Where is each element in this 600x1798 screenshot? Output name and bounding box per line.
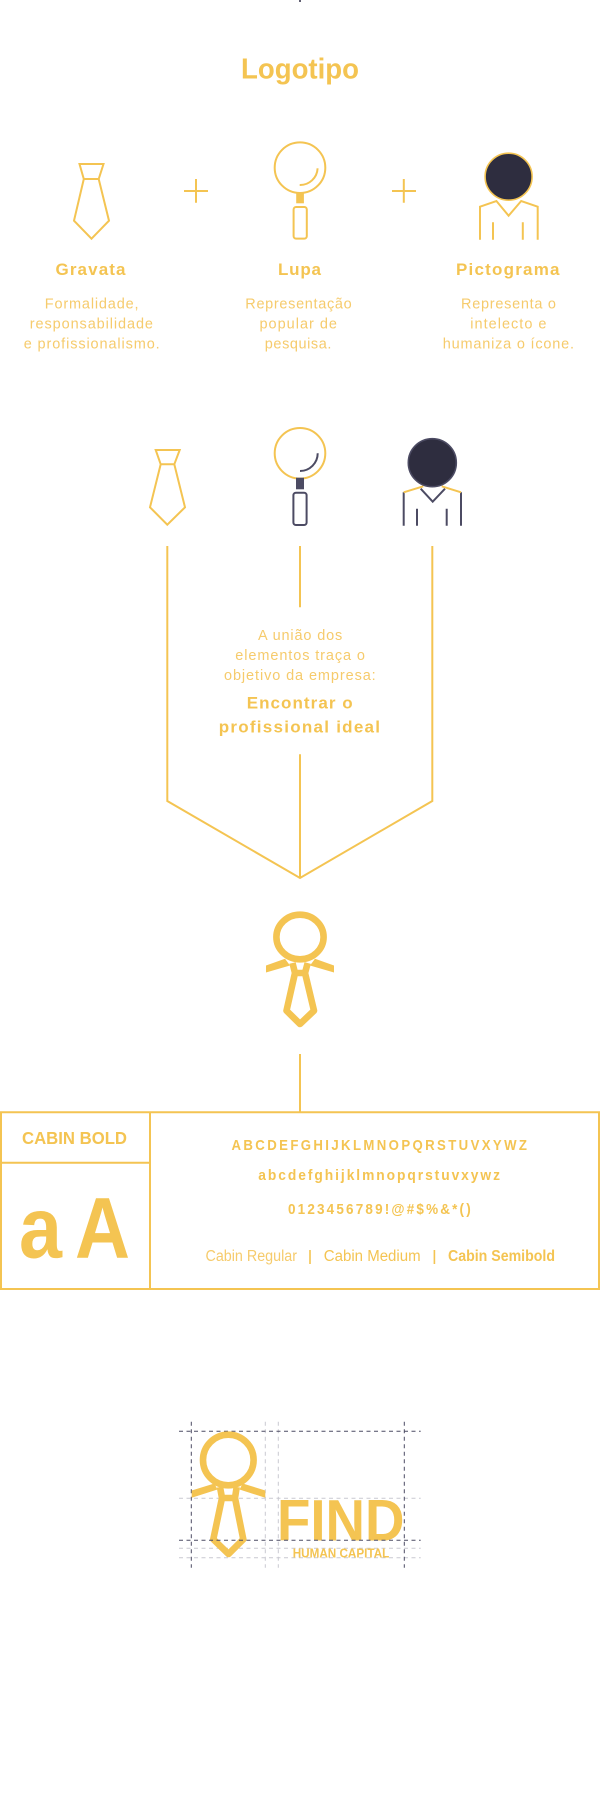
label: Pictograma: Pictograma [456, 260, 560, 279]
text: Pictograma description: humaniza o ícone. [443, 336, 574, 352]
icon: magnifier [275, 142, 325, 239]
logo symbol [192, 1435, 265, 1554]
table frame [0, 1112, 599, 1289]
guide lines [179, 1422, 421, 1568]
panel: logo construction grid [179, 1422, 421, 1568]
text: Lupa description: Representação [245, 296, 352, 312]
text: Pictograma description: Representa o [461, 296, 556, 312]
text: union statement: elementos traça o [235, 648, 365, 664]
icon: logo symbol [266, 915, 334, 1024]
text: union statement: A união dos [258, 628, 342, 644]
text: Gravata description [24, 296, 160, 352]
top connector tick [299, 0, 301, 2]
baseline guide over wordmark [179, 1539, 421, 1541]
label: Cabin Bold: CABIN BOLD [22, 1128, 127, 1148]
wordmark: FIND: FIND [277, 1488, 404, 1553]
specimen: uppercase A: A [75, 1181, 130, 1277]
icon: person [404, 439, 461, 526]
label: Lupa: Lupa [278, 260, 322, 279]
text: Gravata description: Formalidade, [45, 296, 138, 312]
lowercase alphabet: abcdefghijklmnopqrstuvxywz [258, 1168, 500, 1184]
panel: combined elements [150, 428, 461, 526]
icon: pictogram person [480, 153, 538, 240]
wordmark: Human Capital: HUMAN CAPITAL [293, 1546, 389, 1561]
panel: typography table [0, 1112, 599, 1289]
icon: tie [74, 164, 109, 239]
text: Pictograma description: intelecto e [470, 316, 546, 332]
panel: logo elements [24, 142, 574, 352]
uppercase alphabet: ABCDEFGHIJKLMNOPQRSTUVXYWZ [232, 1136, 527, 1153]
text: Pictograma description [443, 296, 574, 352]
text: Lupa description: popular de [260, 316, 337, 332]
icon: magnifier [275, 428, 325, 525]
font weights row: Cabin Medium [324, 1248, 421, 1265]
text: objective highlight: Encontrar o [247, 693, 353, 712]
font weights row: Cabin Regular [206, 1248, 297, 1265]
connector line [299, 1054, 301, 1112]
text: Gravata description: e profissionalismo. [24, 336, 160, 352]
icon: tie [150, 450, 185, 525]
text: Lupa description [245, 296, 352, 352]
text: union statement [224, 628, 376, 684]
text: objective highlight [219, 693, 380, 737]
text: Lupa description: pesquisa. [265, 336, 331, 352]
funnel arrow lines [167, 546, 432, 878]
text: union statement: objetivo da empresa: [224, 668, 376, 684]
label: Gravata: Gravata [56, 260, 126, 279]
text: Gravata description: responsabilidade [30, 316, 153, 332]
font weights row [206, 1248, 555, 1265]
text: objective highlight: profissional ideal [219, 718, 380, 737]
font weights row: Cabin Semibold [448, 1248, 555, 1265]
plus sign 2 [392, 179, 416, 203]
numerals and symbols: 0123456789!@#$%&*() [288, 1201, 471, 1218]
title: Logotipo [241, 54, 359, 86]
plus sign 1 [184, 179, 208, 203]
specimen: lowercase a: a [19, 1181, 63, 1277]
